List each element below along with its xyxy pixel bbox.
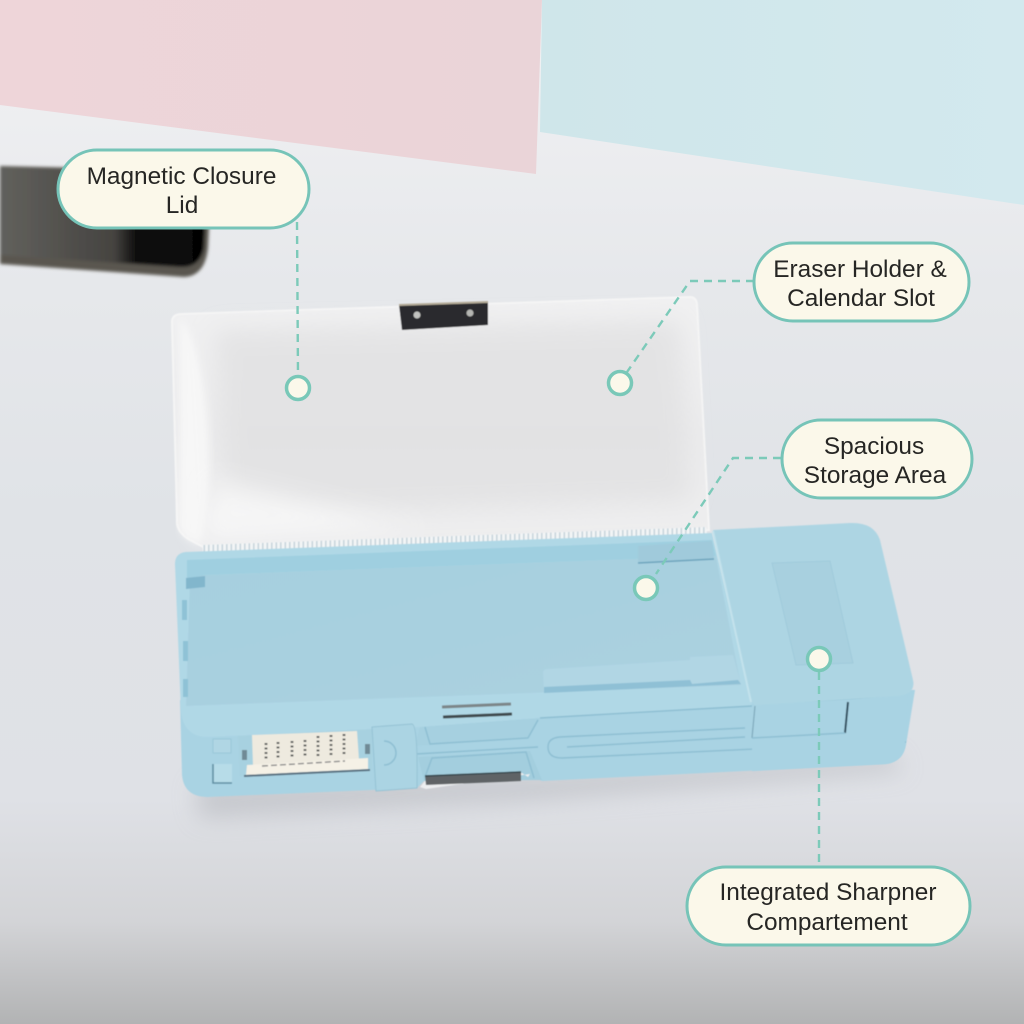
marker dot: lid xyxy=(286,376,310,400)
marker dot: storage area xyxy=(634,576,658,600)
marker dot: eraser holder xyxy=(608,372,632,394)
calendar strip xyxy=(238,729,372,776)
sharpener blade xyxy=(420,773,530,789)
callout: integrated sharpener compartment: Compartement xyxy=(746,909,908,936)
connector: sharpener xyxy=(818,672,820,866)
tray left notch xyxy=(186,576,205,589)
sharpener cover panel xyxy=(772,561,853,665)
callout: spacious storage area xyxy=(782,420,972,498)
tray back rail xyxy=(187,540,716,585)
lid magnet plate xyxy=(399,301,488,330)
connector: eraser holder xyxy=(627,281,754,372)
background: pink board xyxy=(0,0,542,174)
tray floor xyxy=(186,556,741,706)
marker dot: sharpener xyxy=(808,648,830,670)
callout: magnetic closure lid: Magnetic Closure xyxy=(87,163,276,190)
tray rim xyxy=(175,533,752,737)
front recess xyxy=(415,718,540,746)
open lid xyxy=(172,297,709,559)
front wall xyxy=(180,680,915,797)
callout: eraser holder and calendar slot: Eraser Holder & xyxy=(773,256,947,283)
front latch xyxy=(213,739,232,783)
callout: magnetic closure lid: Lid xyxy=(166,192,198,219)
connector: storage area xyxy=(656,458,781,574)
callout: spacious storage area: Storage Area xyxy=(804,462,947,489)
callout: integrated sharpener compartment: Integrated Sharpner xyxy=(720,879,936,906)
front grooves xyxy=(416,695,906,778)
callout: eraser holder and calendar slot: Calendar Slot xyxy=(787,285,935,312)
callout: integrated sharpener compartment xyxy=(687,867,970,945)
slide rail xyxy=(543,655,741,693)
callout: eraser holder and calendar slot xyxy=(754,243,969,321)
background: phone xyxy=(0,166,212,277)
hinge fringe xyxy=(202,527,708,559)
sharpener cover xyxy=(713,523,913,771)
case shadow xyxy=(195,755,905,818)
tray metal slots xyxy=(442,704,512,717)
tray wall clips xyxy=(182,600,188,697)
connector: magnetic closure lid xyxy=(297,222,298,377)
back rail slot xyxy=(638,541,714,564)
callout: magnetic closure lid xyxy=(58,150,309,228)
background: blue board xyxy=(540,0,1024,205)
pencil case base xyxy=(175,533,915,797)
front divider xyxy=(372,724,417,791)
callout: spacious storage area: Spacious xyxy=(824,433,924,460)
